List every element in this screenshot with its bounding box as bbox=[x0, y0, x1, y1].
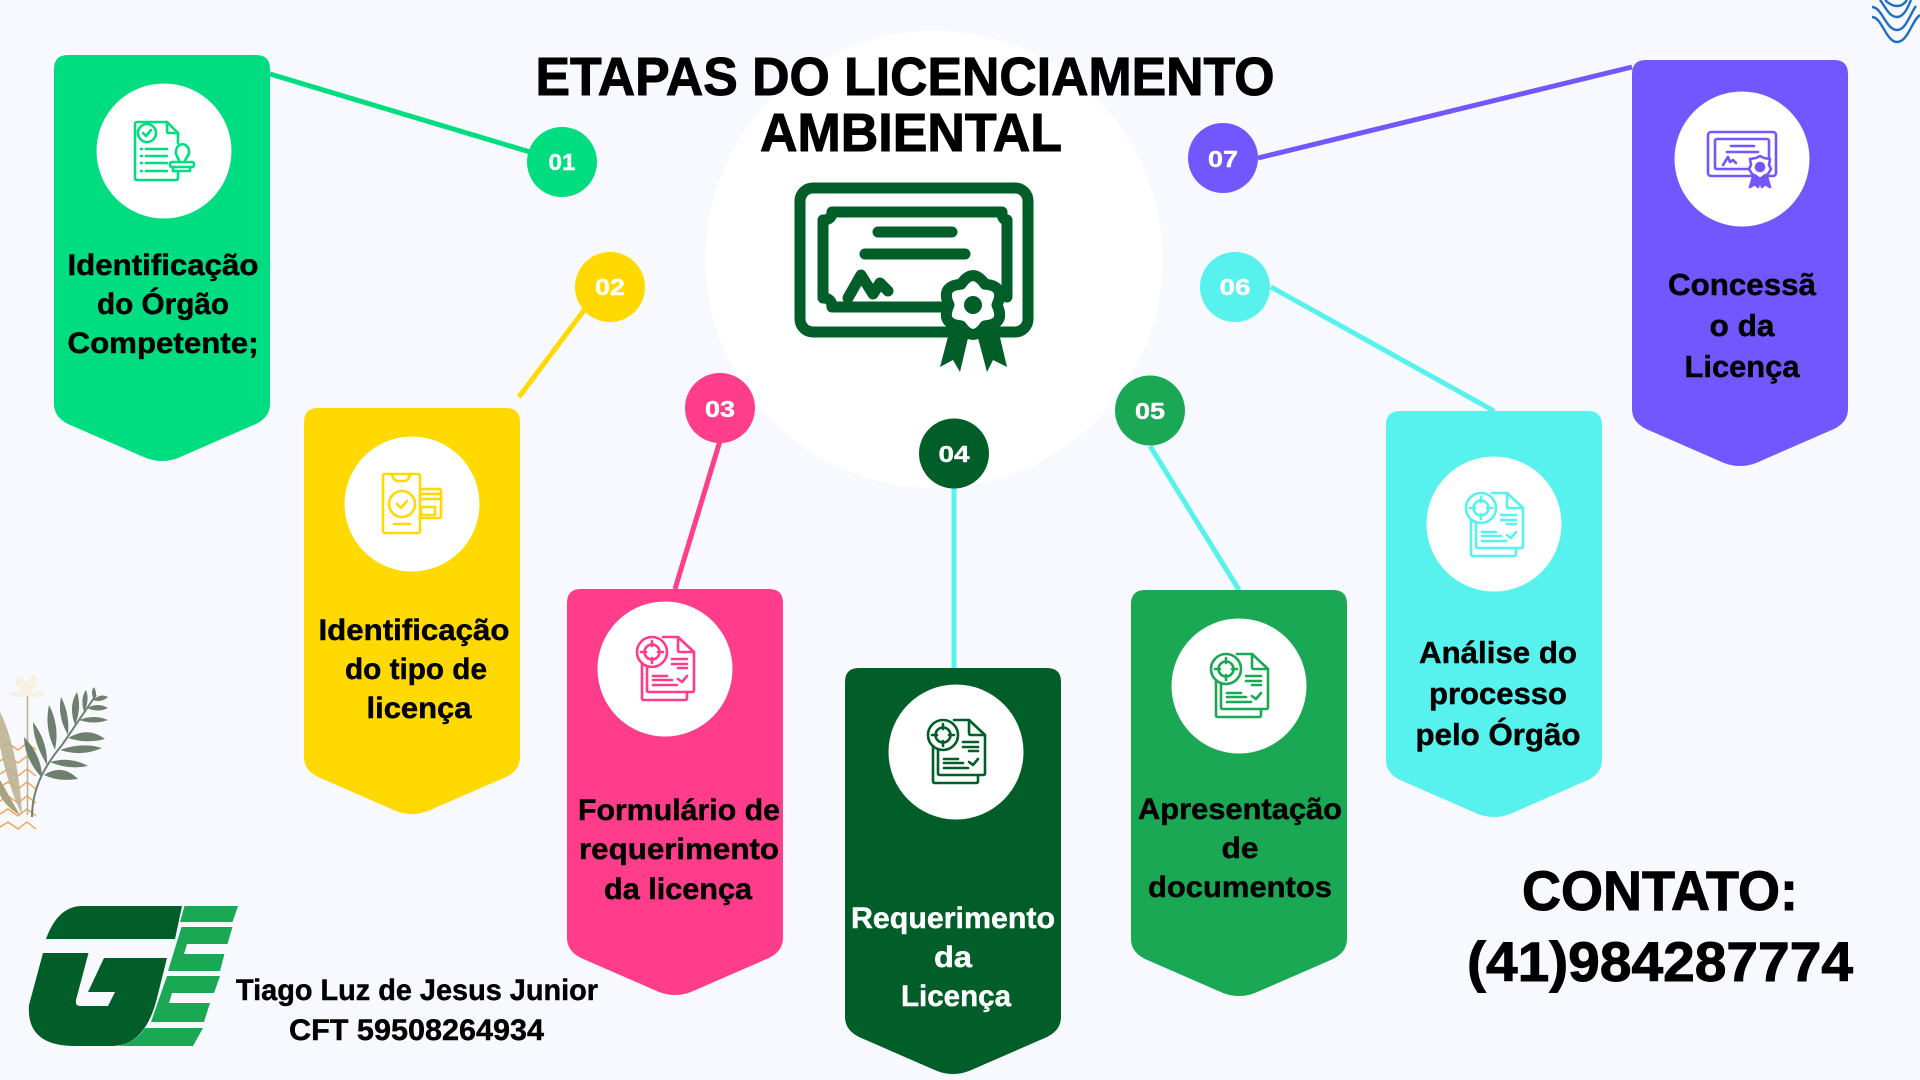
text step 6: pelo Órgão bbox=[1416, 716, 1580, 752]
panel shape 5 bbox=[1131, 590, 1347, 996]
number badge 06: 06 bbox=[1220, 274, 1250, 300]
text step 5: documentos bbox=[1148, 871, 1332, 904]
logo dark G bbox=[29, 906, 182, 1046]
icon: stamped document bbox=[135, 122, 194, 180]
text step 2 bbox=[318, 614, 510, 725]
text step 6: Análise do bbox=[1419, 635, 1577, 670]
number badge 01 bbox=[527, 127, 597, 197]
text step 4: Licença bbox=[901, 980, 1011, 1013]
text step 7: o da bbox=[1710, 308, 1775, 343]
icon: document with target bbox=[637, 637, 694, 700]
panel shape 1 bbox=[54, 55, 270, 461]
panel: step 5 bbox=[1131, 590, 1347, 996]
title bbox=[536, 47, 1274, 163]
contact: (41)984287774 bbox=[1467, 930, 1853, 993]
panel: step 6 bbox=[1386, 411, 1602, 817]
author credit: CFT 59508264934 bbox=[289, 1014, 544, 1047]
number badge 05: 05 bbox=[1135, 398, 1165, 424]
text step 7: Concessã bbox=[1668, 267, 1817, 302]
text step 1: do Órgão bbox=[97, 287, 229, 321]
icon: document with target bbox=[928, 720, 985, 783]
text step 4: Requerimento bbox=[851, 902, 1055, 935]
number badge 02: 02 bbox=[595, 274, 625, 300]
text step 5 bbox=[1138, 793, 1342, 904]
text step 6: processo bbox=[1429, 676, 1567, 711]
icon circle 4 bbox=[888, 684, 1024, 820]
number badge 03: 03 bbox=[705, 396, 735, 422]
decorative waves top right bbox=[1872, 0, 1920, 42]
text step 5: de bbox=[1222, 832, 1258, 865]
number badge 02 bbox=[575, 252, 645, 322]
icon: phone with card bbox=[383, 474, 441, 533]
text step 4: da bbox=[934, 941, 972, 974]
number badge 04: 04 bbox=[938, 441, 970, 467]
icon: central certificate bbox=[800, 188, 1028, 372]
contact bbox=[1467, 859, 1853, 993]
icon circle 1 bbox=[96, 84, 232, 218]
title: ETAPAS DO LICENCIAMENTO bbox=[536, 47, 1274, 107]
icon circle 5 bbox=[1172, 618, 1306, 754]
panel: step 4 bbox=[845, 668, 1061, 1074]
author credit: Tiago Luz de Jesus Junior bbox=[236, 974, 598, 1007]
author credit bbox=[236, 974, 598, 1047]
text step 1: Competente; bbox=[68, 327, 258, 360]
icon circle 2 bbox=[344, 436, 480, 572]
icon: certificate bbox=[1708, 132, 1776, 187]
text step 4 bbox=[851, 902, 1055, 1013]
logo GE bbox=[29, 906, 238, 1046]
icon: document with target bbox=[1211, 654, 1268, 717]
number badge 04 bbox=[919, 418, 989, 488]
icon circle 3 bbox=[598, 602, 732, 736]
text step 2: licença bbox=[366, 692, 472, 725]
icon circle 6 bbox=[1426, 456, 1562, 592]
icon circle 7 bbox=[1674, 92, 1810, 226]
title: AMBIENTAL bbox=[760, 103, 1062, 163]
panel: step 2 bbox=[304, 408, 520, 814]
central white circle bbox=[706, 31, 1162, 488]
connector lines bbox=[270, 67, 1632, 668]
text step 3: da licença bbox=[604, 873, 752, 906]
number badge 01: 01 bbox=[548, 149, 576, 175]
text step 2: Identificação bbox=[318, 614, 510, 647]
number badge 07: 07 bbox=[1208, 146, 1238, 172]
text step 7: Licença bbox=[1684, 349, 1800, 384]
logo green E stripes bbox=[118, 906, 238, 1046]
text step 3: requerimento bbox=[579, 833, 779, 866]
text step 1 bbox=[68, 249, 258, 360]
text step 6 bbox=[1416, 635, 1580, 752]
contact: CONTATO: bbox=[1522, 859, 1798, 922]
panel shape 3 bbox=[567, 589, 783, 995]
text step 3: Formulário de bbox=[578, 794, 780, 827]
text step 1: Identificação bbox=[68, 249, 258, 282]
text step 5: Apresentação bbox=[1138, 793, 1342, 826]
decorative plant bbox=[0, 675, 108, 829]
icon: document with target bbox=[1466, 493, 1523, 556]
panel shape 6 bbox=[1386, 411, 1602, 817]
panel: step 3 bbox=[567, 589, 783, 995]
panel: step 1 bbox=[54, 55, 270, 461]
text step 3 bbox=[578, 794, 780, 906]
number badge 03 bbox=[685, 373, 755, 443]
panel shape 2 bbox=[304, 408, 520, 814]
number badge 05 bbox=[1115, 376, 1185, 446]
panel shape 4 bbox=[845, 668, 1061, 1074]
number badge 06 bbox=[1200, 252, 1270, 322]
panel: step 7 bbox=[1632, 60, 1848, 466]
text step 2: do tipo de bbox=[345, 653, 487, 686]
panel shape 7 bbox=[1632, 60, 1848, 466]
number badge 07 bbox=[1188, 123, 1258, 193]
text step 7 bbox=[1668, 267, 1817, 384]
